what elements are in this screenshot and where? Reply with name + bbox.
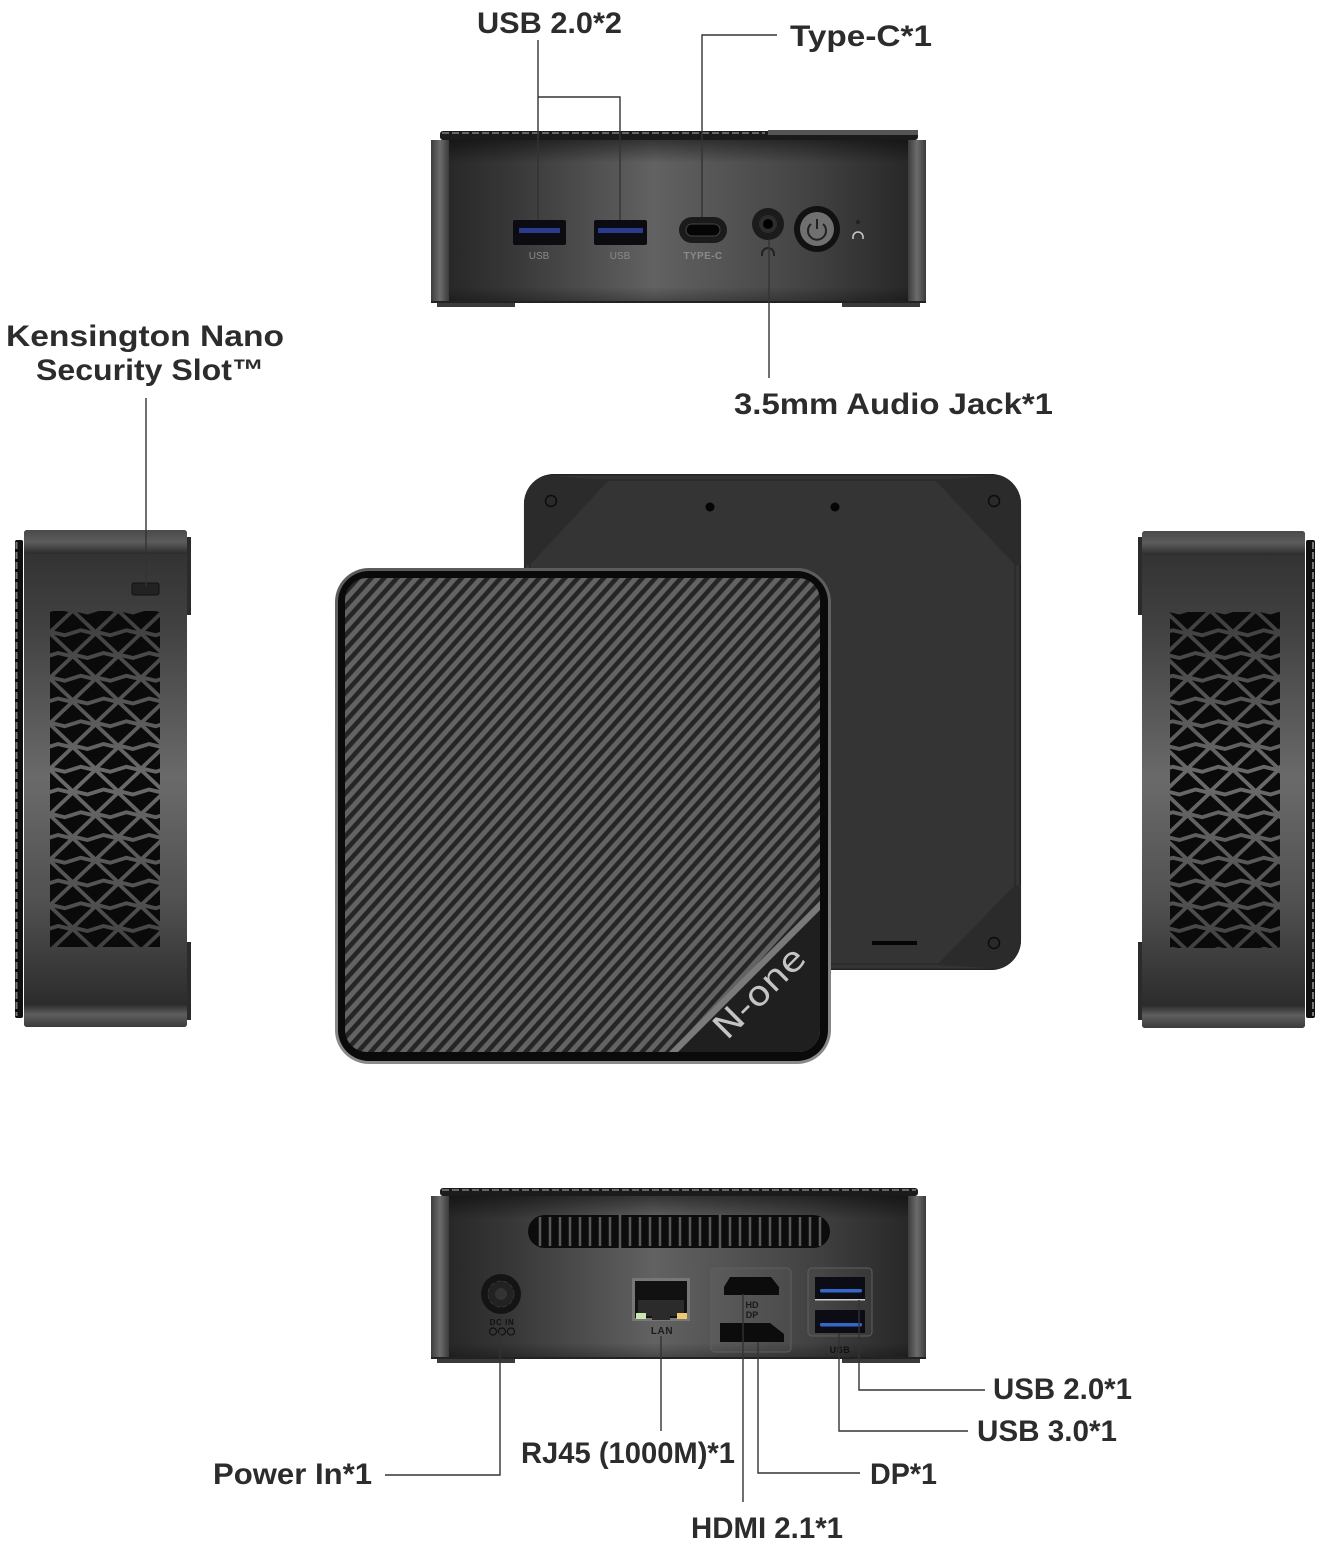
- callout: USB 2.0*2: USB 2.0*2: [477, 7, 622, 40]
- device: right side view: [1138, 531, 1315, 1028]
- indicator icons: [853, 220, 863, 239]
- device: front view (top): [431, 130, 926, 307]
- callout: Kensington Nano Security Slot: Kensington Nano: [6, 320, 284, 353]
- Kensington slot: [132, 583, 159, 595]
- callout: USB 3.0*1: USB 3.0*1: [977, 1415, 1117, 1448]
- device: left side view: [15, 530, 191, 1027]
- port: USB 2: USB: [610, 251, 631, 262]
- callout: 3.5mm Audio Jack*1: 3.5mm Audio Jack*1: [734, 388, 1053, 421]
- port: power jack: DC IN: [490, 1318, 514, 1327]
- ventilation mesh: [1170, 612, 1280, 948]
- port: USB 1: [513, 220, 566, 262]
- callout: Type-C*1: [702, 20, 932, 217]
- DP marker: DP: [746, 1310, 758, 1320]
- feet: [437, 1356, 920, 1363]
- body: [431, 140, 926, 303]
- port: LAN: [632, 1278, 690, 1337]
- power button: [794, 206, 840, 252]
- USB marker: USB: [830, 1345, 850, 1355]
- ventilation mesh: [50, 611, 160, 947]
- port: Type-C: TYPE-C: [683, 251, 723, 262]
- body: [24, 530, 187, 1027]
- rear foot: [186, 537, 191, 615]
- top plate: [440, 130, 918, 140]
- mount holes: [706, 502, 840, 512]
- slot: [872, 941, 917, 945]
- callout: Type-C*1: Type-C*1: [790, 20, 932, 53]
- port: audio jack: [752, 208, 784, 256]
- port: power jack: [481, 1274, 521, 1335]
- front foot: [1138, 942, 1143, 1020]
- feet: [437, 300, 920, 307]
- top plate: [440, 1188, 918, 1196]
- logo corner: [668, 900, 821, 1053]
- device: rear view (bottom): [431, 1188, 926, 1363]
- port: USB 3.0: [815, 1310, 865, 1333]
- device: underside panel (back): [524, 474, 1021, 970]
- callout: DP*1: DP*1: [870, 1458, 937, 1491]
- port: Type-C: [679, 217, 727, 262]
- thin top plate edge: [1306, 540, 1315, 1018]
- callout: Kensington Nano Security Slot: Security Slot™: [36, 354, 264, 387]
- body: [431, 1196, 926, 1359]
- port: LAN: LAN: [651, 1326, 673, 1337]
- callout: Power In*1: Power In*1: [213, 1458, 372, 1491]
- rear foot: [1138, 537, 1143, 615]
- port: USB 2.0: [815, 1277, 865, 1299]
- HDMI marker: HD: [746, 1300, 759, 1310]
- screws: [546, 496, 1000, 948]
- logo: N-one: [705, 938, 814, 1047]
- callout: RJ45 (1000M)*1: RJ45 (1000M)*1: [521, 1437, 735, 1470]
- port: USB 1: USB: [529, 251, 550, 262]
- thin top plate edge: [15, 540, 23, 1018]
- callout: USB 2.0*2: [477, 7, 622, 220]
- rubber corners: [524, 474, 1021, 970]
- vent slot: [528, 1215, 830, 1248]
- callout: Power In*1: [213, 1330, 500, 1491]
- callout: USB 3.0*1: [839, 1333, 1117, 1448]
- callout: USB 2.0*1: USB 2.0*1: [993, 1373, 1132, 1406]
- callout: DP*1: [758, 1342, 937, 1491]
- callout: Kensington Nano Security Slot: [6, 320, 284, 586]
- callout: USB 2.0*1: [859, 1300, 1132, 1406]
- port group: HDMI and DP: [711, 1268, 791, 1352]
- body: [1142, 531, 1305, 1028]
- port: DP: [720, 1323, 784, 1342]
- device: top lid (front): [335, 568, 831, 1064]
- port group: USB: [808, 1268, 872, 1355]
- port: USB 2: [594, 220, 647, 262]
- port: HDMI: [724, 1277, 779, 1295]
- callout: HDMI 2.1*1: HDMI 2.1*1: [691, 1512, 843, 1545]
- front foot: [186, 942, 191, 1020]
